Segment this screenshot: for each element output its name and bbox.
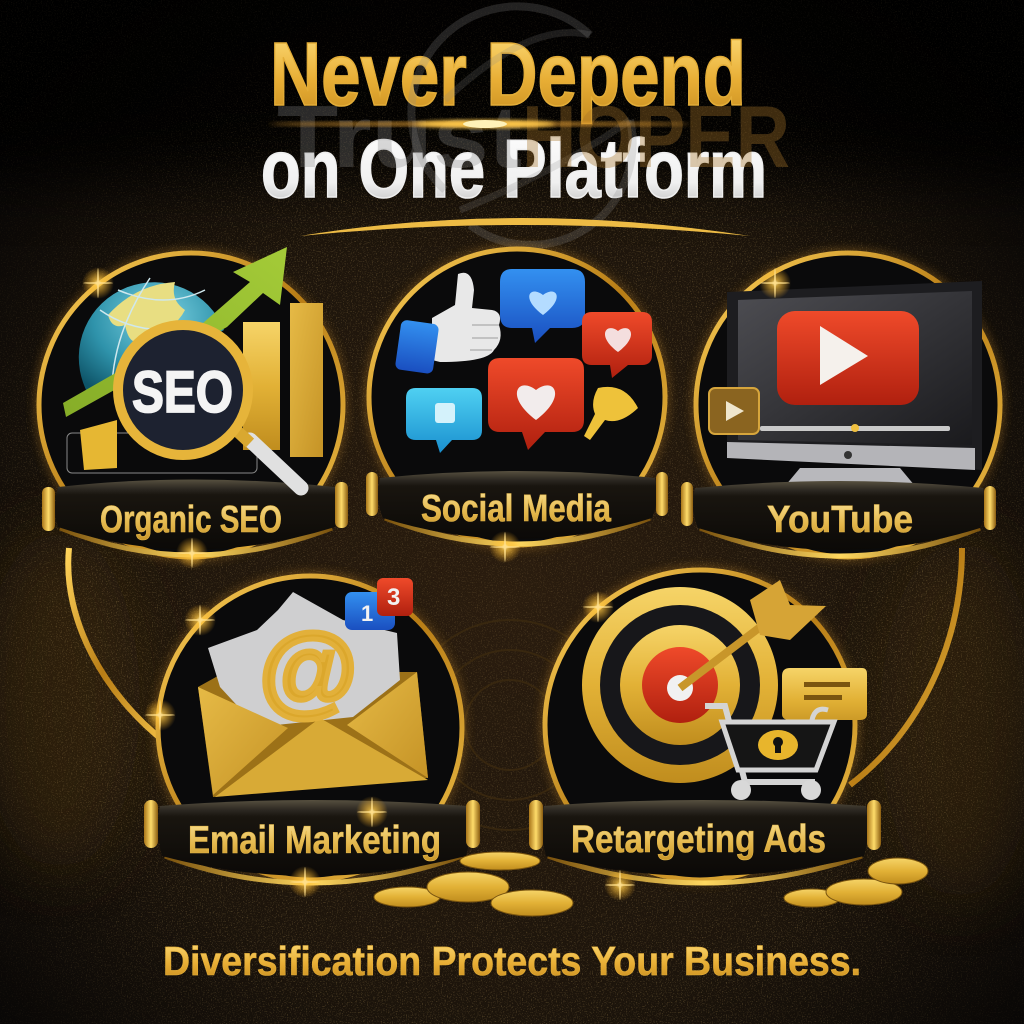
title: on One Platform (261, 122, 767, 215)
connecting ring (68, 548, 962, 785)
icon: blue heart bubble (500, 269, 585, 343)
icon: play button (777, 311, 919, 405)
tagline: Diversification Protects Your Business. (163, 938, 861, 984)
watermark logo (277, 6, 790, 245)
icon: blue square (395, 319, 439, 374)
plaque (681, 481, 996, 556)
watermark logo: Trust (277, 87, 522, 186)
icon: globe (79, 278, 224, 400)
panel: Email Marketing (144, 576, 480, 883)
icon: notification badges: 1 (361, 601, 373, 626)
panel: Retargeting Ads (529, 570, 881, 883)
plaque (366, 471, 668, 544)
icon: at sign: @ (259, 614, 358, 726)
icon: envelope (198, 592, 428, 797)
watermark logo: HOPER (522, 87, 790, 186)
icon: magnifying glass: SEO (132, 360, 233, 425)
icon: growth arrow (63, 247, 287, 417)
icon: cyan bubble (406, 388, 482, 453)
title underline arc (300, 218, 750, 236)
icon: notification badges: 3 (387, 584, 400, 611)
plaque (529, 800, 881, 883)
icon: red heart bubble small (582, 312, 652, 378)
panel: Organic SEO (39, 247, 348, 557)
title (261, 25, 767, 215)
plaque: YouTube (767, 499, 913, 541)
icon: arrow (680, 580, 826, 688)
icon: thumbs up (432, 273, 501, 362)
plaque: Social Media (421, 488, 612, 530)
plaque: Retargeting Ads (571, 818, 826, 861)
icon: shopping cart (705, 706, 834, 800)
title: Never Depend (270, 25, 746, 125)
plaque (144, 800, 480, 883)
icon: small video tile (709, 388, 759, 434)
icon: gold bars (80, 303, 323, 470)
plaque: Email Marketing (188, 819, 441, 862)
sparkles (82, 267, 791, 901)
icon: monitor (727, 281, 982, 486)
icon: target (582, 587, 778, 783)
gold coins (374, 852, 928, 916)
concentric decoration (405, 620, 615, 830)
icon: gold message (782, 668, 867, 732)
icon: red heart bubble large (488, 358, 584, 450)
icon: gold pin (584, 387, 638, 440)
chart baseline frame (67, 433, 257, 473)
plaque (42, 480, 348, 555)
icon: magnifying glass (118, 325, 301, 488)
icon: notification badges (345, 578, 413, 630)
panel: YouTube (681, 253, 1000, 557)
plaque: Organic SEO (100, 499, 282, 541)
panel: Social Media (366, 249, 668, 545)
progress bar (760, 424, 950, 432)
title flare (270, 120, 690, 128)
